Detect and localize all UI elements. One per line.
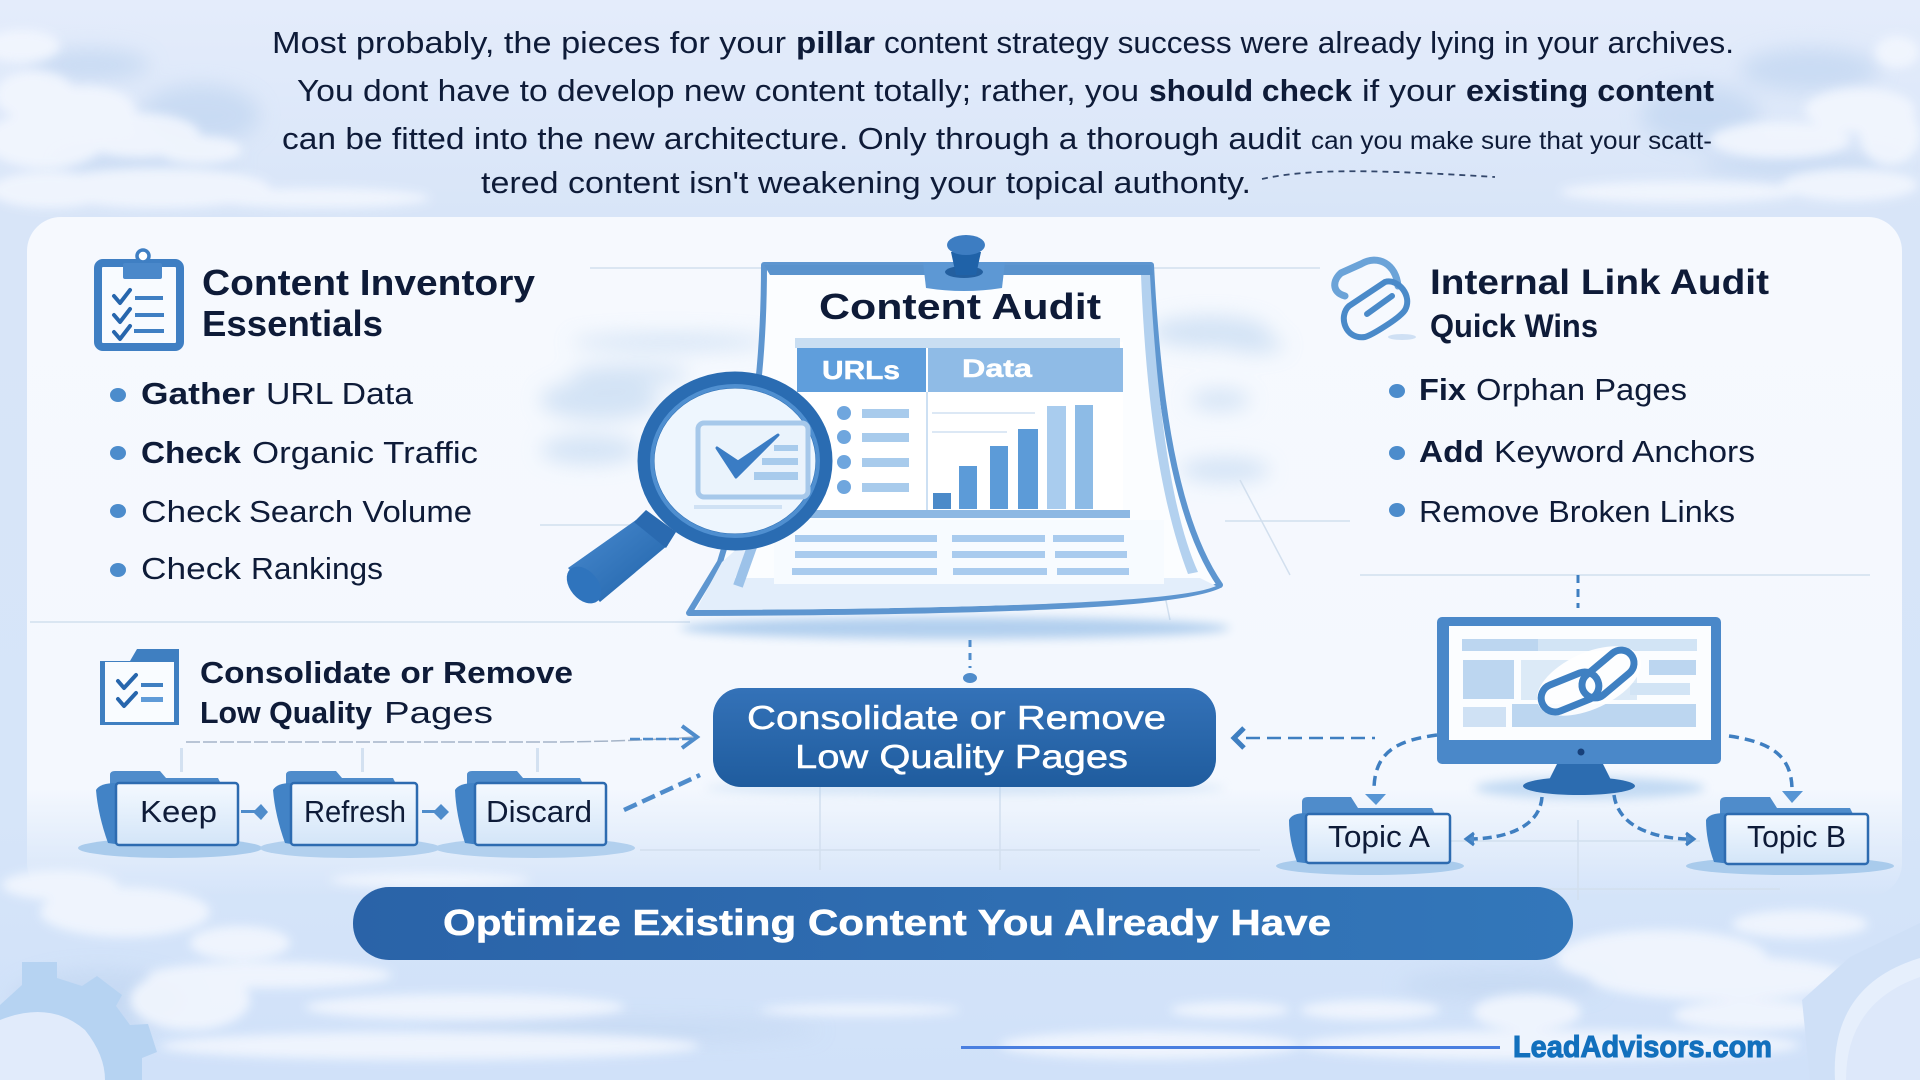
heading: content inventory essentials: Content Inventory	[202, 262, 535, 303]
document title: Content Audit	[819, 286, 1101, 327]
heading: consolidate or remove	[200, 655, 573, 730]
folder: topic b: Topic B	[1747, 819, 1846, 854]
connector: refresh to discard	[422, 804, 449, 820]
folder: discard: Discard	[486, 794, 592, 829]
content audit document illustration	[680, 235, 1230, 639]
intro paragraph: pillar	[796, 25, 875, 60]
list: internal link quick wins	[1389, 372, 1755, 529]
heading: content inventory essentials	[202, 262, 535, 344]
folder: topic a: Topic A	[1328, 819, 1430, 854]
list: content inventory items: Check	[141, 551, 242, 586]
footer brand: LeadAdvisors.com	[1513, 1029, 1772, 1064]
list: content inventory items: Check	[141, 494, 242, 529]
list: internal link quick wins: Keyword Anchors	[1494, 434, 1755, 469]
list: content inventory items	[110, 376, 478, 586]
arrow: discard to main pill	[624, 775, 700, 810]
intro paragraph: existing content	[1466, 73, 1714, 108]
dashed line above monitor	[1576, 575, 1580, 608]
folder: topic a	[1276, 797, 1464, 875]
list: content inventory items: Check	[141, 435, 242, 470]
heading: consolidate or remove: Consolidate or Remove	[200, 655, 573, 690]
list: content inventory items: URL Data	[266, 376, 414, 411]
gear watermark bottom left	[0, 962, 157, 1080]
heading: content inventory essentials: Essentials	[202, 303, 383, 344]
list: content inventory items: Gather	[141, 376, 255, 411]
intro paragraph: can you make sure that your scatt-	[1311, 127, 1712, 155]
arrow: monitor to topic b lower	[1614, 795, 1694, 845]
icon: monitor with link	[1437, 617, 1721, 799]
heading: consolidate or remove: Low Quality	[200, 695, 373, 730]
list: internal link quick wins: Fix	[1419, 372, 1467, 407]
connector: keep to refresh	[241, 804, 268, 820]
arrow: monitor to topic b	[1729, 736, 1803, 803]
arrow: monitor to topic a lower	[1466, 797, 1542, 845]
intro paragraph: if your	[1362, 73, 1456, 108]
intro paragraph: can be fitted into the new architecture. Only through a thorough audit	[282, 121, 1301, 156]
folder: discard	[435, 748, 635, 858]
folder: keep: Keep	[140, 794, 217, 829]
heading: internal link audit quick wins: Internal Link Audit	[1430, 263, 1769, 302]
connector: document to pill	[963, 640, 977, 683]
intro paragraph: You dont have to develop new content totally; rather, you	[297, 73, 1139, 108]
data table: Data	[962, 355, 1033, 383]
folder: refresh: Refresh	[304, 794, 406, 829]
arrow: monitor to pill	[1234, 728, 1375, 748]
heading: internal link audit quick wins: Quick Wins	[1430, 308, 1598, 344]
icon: magnifying glass	[560, 380, 824, 610]
list: content inventory items: Search Volume	[249, 494, 472, 529]
heading: internal link audit quick wins	[1430, 263, 1769, 344]
folder: keep	[78, 748, 262, 858]
icon: paperclip link	[1335, 260, 1416, 340]
folder: refresh	[260, 748, 440, 858]
intro paragraph: Most probably, the pieces for your	[272, 25, 786, 60]
list: internal link quick wins: Add	[1419, 434, 1484, 469]
intro paragraph: should check	[1149, 73, 1353, 108]
intro paragraph: content strategy success were already lying in your archives.	[884, 25, 1734, 60]
clip and pin	[923, 235, 1005, 291]
heading: consolidate or remove: Pages	[384, 695, 493, 730]
callout pill: consolidate or remove: Consolidate or Remove	[747, 699, 1166, 736]
list: internal link quick wins: Remove Broken Links	[1419, 494, 1735, 529]
main panel	[27, 217, 1902, 900]
folder: topic b	[1686, 797, 1894, 875]
icon: clipboard checklist	[98, 250, 180, 347]
callout pill: consolidate or remove	[705, 688, 1225, 795]
data table	[770, 338, 1130, 575]
list: content inventory items: Rankings	[251, 551, 383, 586]
list: content inventory items: Organic Traffic	[252, 435, 478, 470]
banner: optimize existing content: Optimize Existing Content You Already Have	[443, 902, 1331, 943]
icon: folder checklist	[100, 649, 179, 725]
footer rule	[961, 1046, 1500, 1049]
banner: optimize existing content	[353, 887, 1573, 960]
intro paragraph	[272, 25, 1734, 200]
arrow: heading to main pill	[186, 726, 697, 748]
data table: URLs	[822, 355, 900, 385]
gear watermark bottom right	[1802, 923, 1920, 1080]
list: internal link quick wins: Orphan Pages	[1476, 372, 1687, 407]
intro paragraph: tered content isn't weakening your topical authonty.	[481, 165, 1251, 200]
callout pill: consolidate or remove: Low Quality Pages	[795, 738, 1128, 775]
arrow: monitor to topic a	[1365, 735, 1437, 805]
